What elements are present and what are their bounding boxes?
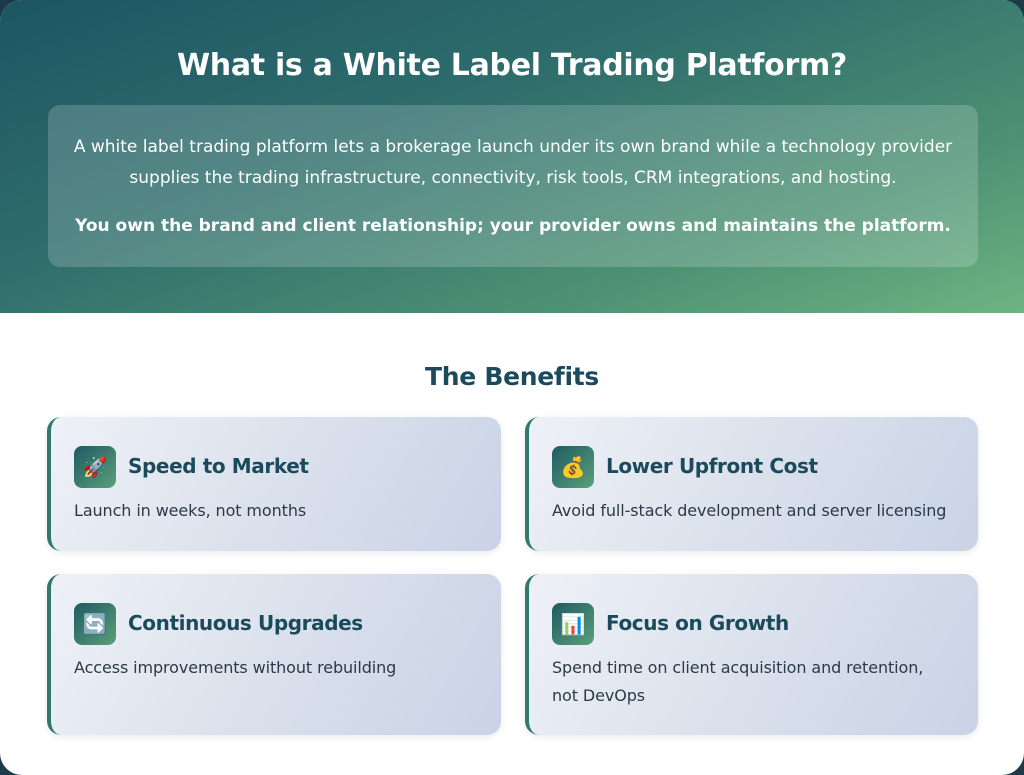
icon: chart: 📊 [561,612,585,636]
card: focus on growth: Focus on Growth [606,611,789,635]
definition box: You own the brand and client relationship; your provider owns and maintains the platform. [75,216,951,236]
card: speed to market: Speed to Market [128,454,309,478]
card: speed to market: Launch in weeks, not months [74,501,306,520]
card: lower upfront cost: Avoid full-stack development and server licensing [552,501,946,520]
definition box [48,105,978,267]
icon: money bag [552,446,594,488]
card: continuous upgrades: Access improvements without rebuilding [74,658,396,677]
icon: rocket: 🚀 [83,455,107,479]
definition box: A white label trading platform lets a brokerage launch under its own brand while a technology provider [74,137,952,157]
card: continuous upgrades [47,574,501,735]
card: speed to market [47,417,501,551]
icon: chart [552,603,594,645]
card: continuous upgrades: Continuous Upgrades [128,611,363,635]
card: lower upfront cost: Lower Upfront Cost [606,454,818,478]
card: focus on growth: Spend time on client acquisition and retention, [552,658,923,677]
definition box: supplies the trading infrastructure, connectivity, risk tools, CRM integrations, and hosting. [129,168,897,188]
title: What is a White Label Trading Platform? [177,48,847,83]
benefits heading: The Benefits [425,362,599,391]
icon: refresh: 🔄 [83,612,107,636]
icon: refresh [74,603,116,645]
card: lower upfront cost [525,417,978,551]
card: focus on growth: not DevOps [552,686,645,705]
icon: rocket [74,446,116,488]
icon: money bag: 💰 [561,455,585,479]
card: focus on growth [525,574,978,735]
header panel [0,0,1024,313]
